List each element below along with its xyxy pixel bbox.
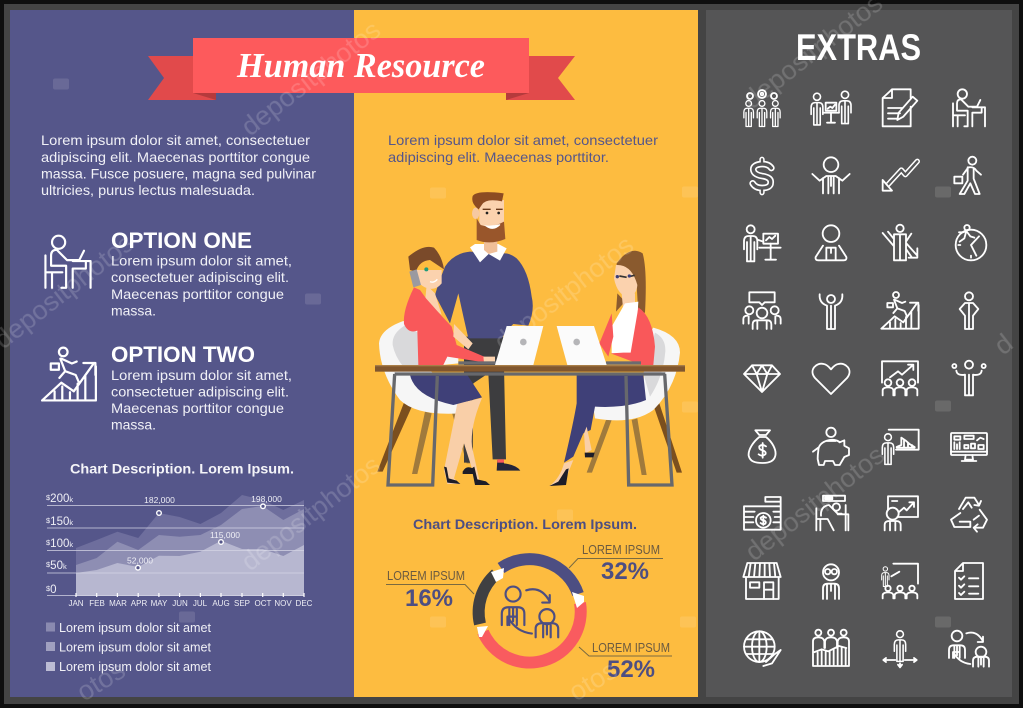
icon: zigzag falling arrow [883,161,917,191]
icon grid [743,89,989,667]
icon: presenter falling chart [882,430,919,464]
intro paragraph: Lorem ipsum dolor sit amet, consectetuer [41,132,310,148]
data markers [136,504,265,570]
legend: Lorem ipsum dolor sit amet [59,659,211,674]
data values: 182,000 [144,495,175,505]
month labels: DEC [296,599,313,608]
icon: man hands on hips [960,292,978,329]
icon: person at desk [953,89,985,126]
icon: runner on rising chart [881,292,919,329]
data values: 198,000 [251,494,282,504]
month labels: APR [131,599,147,608]
y axis labels: k [69,518,73,527]
y axis labels: 50 [50,560,63,572]
watermark: depositphotos [739,440,890,567]
left chair [377,321,472,474]
month labels: OCT [255,599,272,608]
panel: extras [706,10,1012,697]
intro paragraph [41,132,316,198]
icon: shop [743,563,781,599]
y axis labels: k [69,495,73,504]
chart heading: Chart Description. Lorem Ipsum. [70,460,294,476]
icon: heart [813,364,849,394]
icon: runner and clock [956,225,986,260]
option one: OPTION ONE [111,228,252,253]
callout 16% [386,568,474,612]
data values [127,494,282,566]
icon: bust [816,225,846,260]
month labels [68,599,313,608]
legend: Lorem ipsum dolor sit amet [59,640,211,654]
segment 16% [479,574,496,624]
chart heading: Chart Description. Lorem Ipsum. [413,516,637,532]
month labels: AUG [212,599,230,608]
standing man [435,192,533,471]
watermark cameras [53,78,951,628]
intro paragraph: adipiscing elit. Maecenas porttitor congue [41,149,310,165]
watermark: depositphotos [235,15,386,142]
y axis labels: 0 [50,584,57,596]
icon: walking with briefcase [954,157,981,194]
icon: presenter with screen [744,225,781,261]
option two: massa. [111,416,156,432]
icon: piggy bank [813,428,849,465]
option two [111,342,292,432]
panel: yellow centre [354,10,698,697]
option two: consectetuer adipiscing elit. [111,384,289,400]
option two: OPTION TWO [111,342,255,367]
icon: recycle [951,498,987,532]
icon: teacher with audience [882,564,918,598]
icon: globe [744,631,781,666]
callout 32% [569,542,663,585]
donut chart [477,559,584,663]
icon: dollar sign [753,159,771,193]
y axis labels: $ [46,584,51,593]
icon: monitor dashboard [951,433,987,461]
y axis labels: k [69,540,73,549]
month labels: MAR [109,599,127,608]
legend: Lorem ipsum dolor sit amet [59,620,211,635]
option one: Maecenas porttitor congue [111,286,284,302]
month labels: JUN [172,599,188,608]
option one: massa. [111,302,156,318]
icon: man with glasses [823,564,839,599]
laptops [495,326,607,365]
icon: tired worker [816,496,848,530]
icon: man shrugging [812,157,850,193]
desk [375,365,685,485]
watermark: otos [563,655,622,707]
callout 52%: 52% [607,656,655,683]
callout 16%: 16% [405,585,453,612]
y axis labels: $ [46,538,51,547]
callout 52%: LOREM IPSUM [592,640,670,655]
y axis labels: 150 [50,516,69,528]
icon: coins [744,497,781,530]
icon: document and pen [883,89,917,126]
y axis labels: k [63,562,67,571]
icon: diamond [744,365,780,392]
title ribbon [148,38,575,100]
callout 52% [579,640,672,683]
callout 16%: LOREM IPSUM [387,568,465,583]
option two: Maecenas porttitor congue [111,400,284,416]
legend [46,620,211,674]
data values: 115,000 [210,530,240,540]
intro paragraph: Lorem ipsum dolor sit amet, consectetuer [388,132,658,148]
segment 52% [483,603,581,663]
area chart [46,493,313,608]
month labels: NOV [274,599,292,608]
callout 32%: LOREM IPSUM [582,542,660,557]
watermark: d [988,328,1019,361]
icon: checklist [955,563,983,599]
icon: runner on rising chart [42,348,96,400]
month labels: JAN [68,599,84,608]
icon: three people and chart [813,630,849,666]
watermark: depositphotos [488,230,639,357]
arrows [477,568,584,637]
icon: two people exchange [949,631,989,667]
y axis labels [46,493,73,596]
icon: man arms up [820,294,842,329]
title: Human Resource [236,46,485,85]
left woman [404,247,497,485]
y axis labels: 200 [50,493,69,505]
watermark: depositphotos [235,450,386,577]
icon: person at desk [45,236,91,288]
icon: two people exchange [502,587,558,637]
right woman [549,251,655,486]
intro paragraph [388,132,658,165]
segment 32% [501,559,578,594]
icon: bust with board [885,496,918,530]
y axis labels: $ [46,493,51,502]
icon: chart with audience [882,361,918,395]
y axis labels: $ [46,560,51,569]
intro paragraph: massa. Fusce posuere, magna sed pulvinar [41,166,316,182]
illustration: three colleagues at desk [375,192,685,486]
heading: EXTRAS [796,27,921,68]
icon: man with dollars [952,361,986,395]
watermark: otos [71,655,130,707]
month labels: JUL [193,599,208,608]
icon: group with speech bubble [743,292,781,329]
icon: man with direction arrows [883,631,917,667]
y axis labels: $ [46,516,51,525]
option one: consectetuer adipiscing elit. [111,269,289,285]
month labels: SEP [234,599,250,608]
right chair [587,328,682,475]
icon: money bag [749,430,776,463]
data values: 52,000 [127,556,153,566]
intro paragraph: adipiscing elit. Maecenas porttitor. [388,149,609,165]
option one: Lorem ipsum dolor sit amet, [111,252,292,268]
option one [111,228,292,318]
month labels: FEB [89,599,105,608]
y axis labels: 100 [50,538,69,550]
panel: purple left [10,10,354,697]
callout 32%: 32% [601,558,649,585]
icon: man with down arrow [883,225,917,260]
icon: team with gears [744,90,780,126]
intro paragraph: ultricies, purus lectus malesuada. [41,182,255,198]
option two: Lorem ipsum dolor sit amet, [111,367,292,383]
icon: two men with board [811,91,851,125]
month labels: MAY [151,599,168,608]
